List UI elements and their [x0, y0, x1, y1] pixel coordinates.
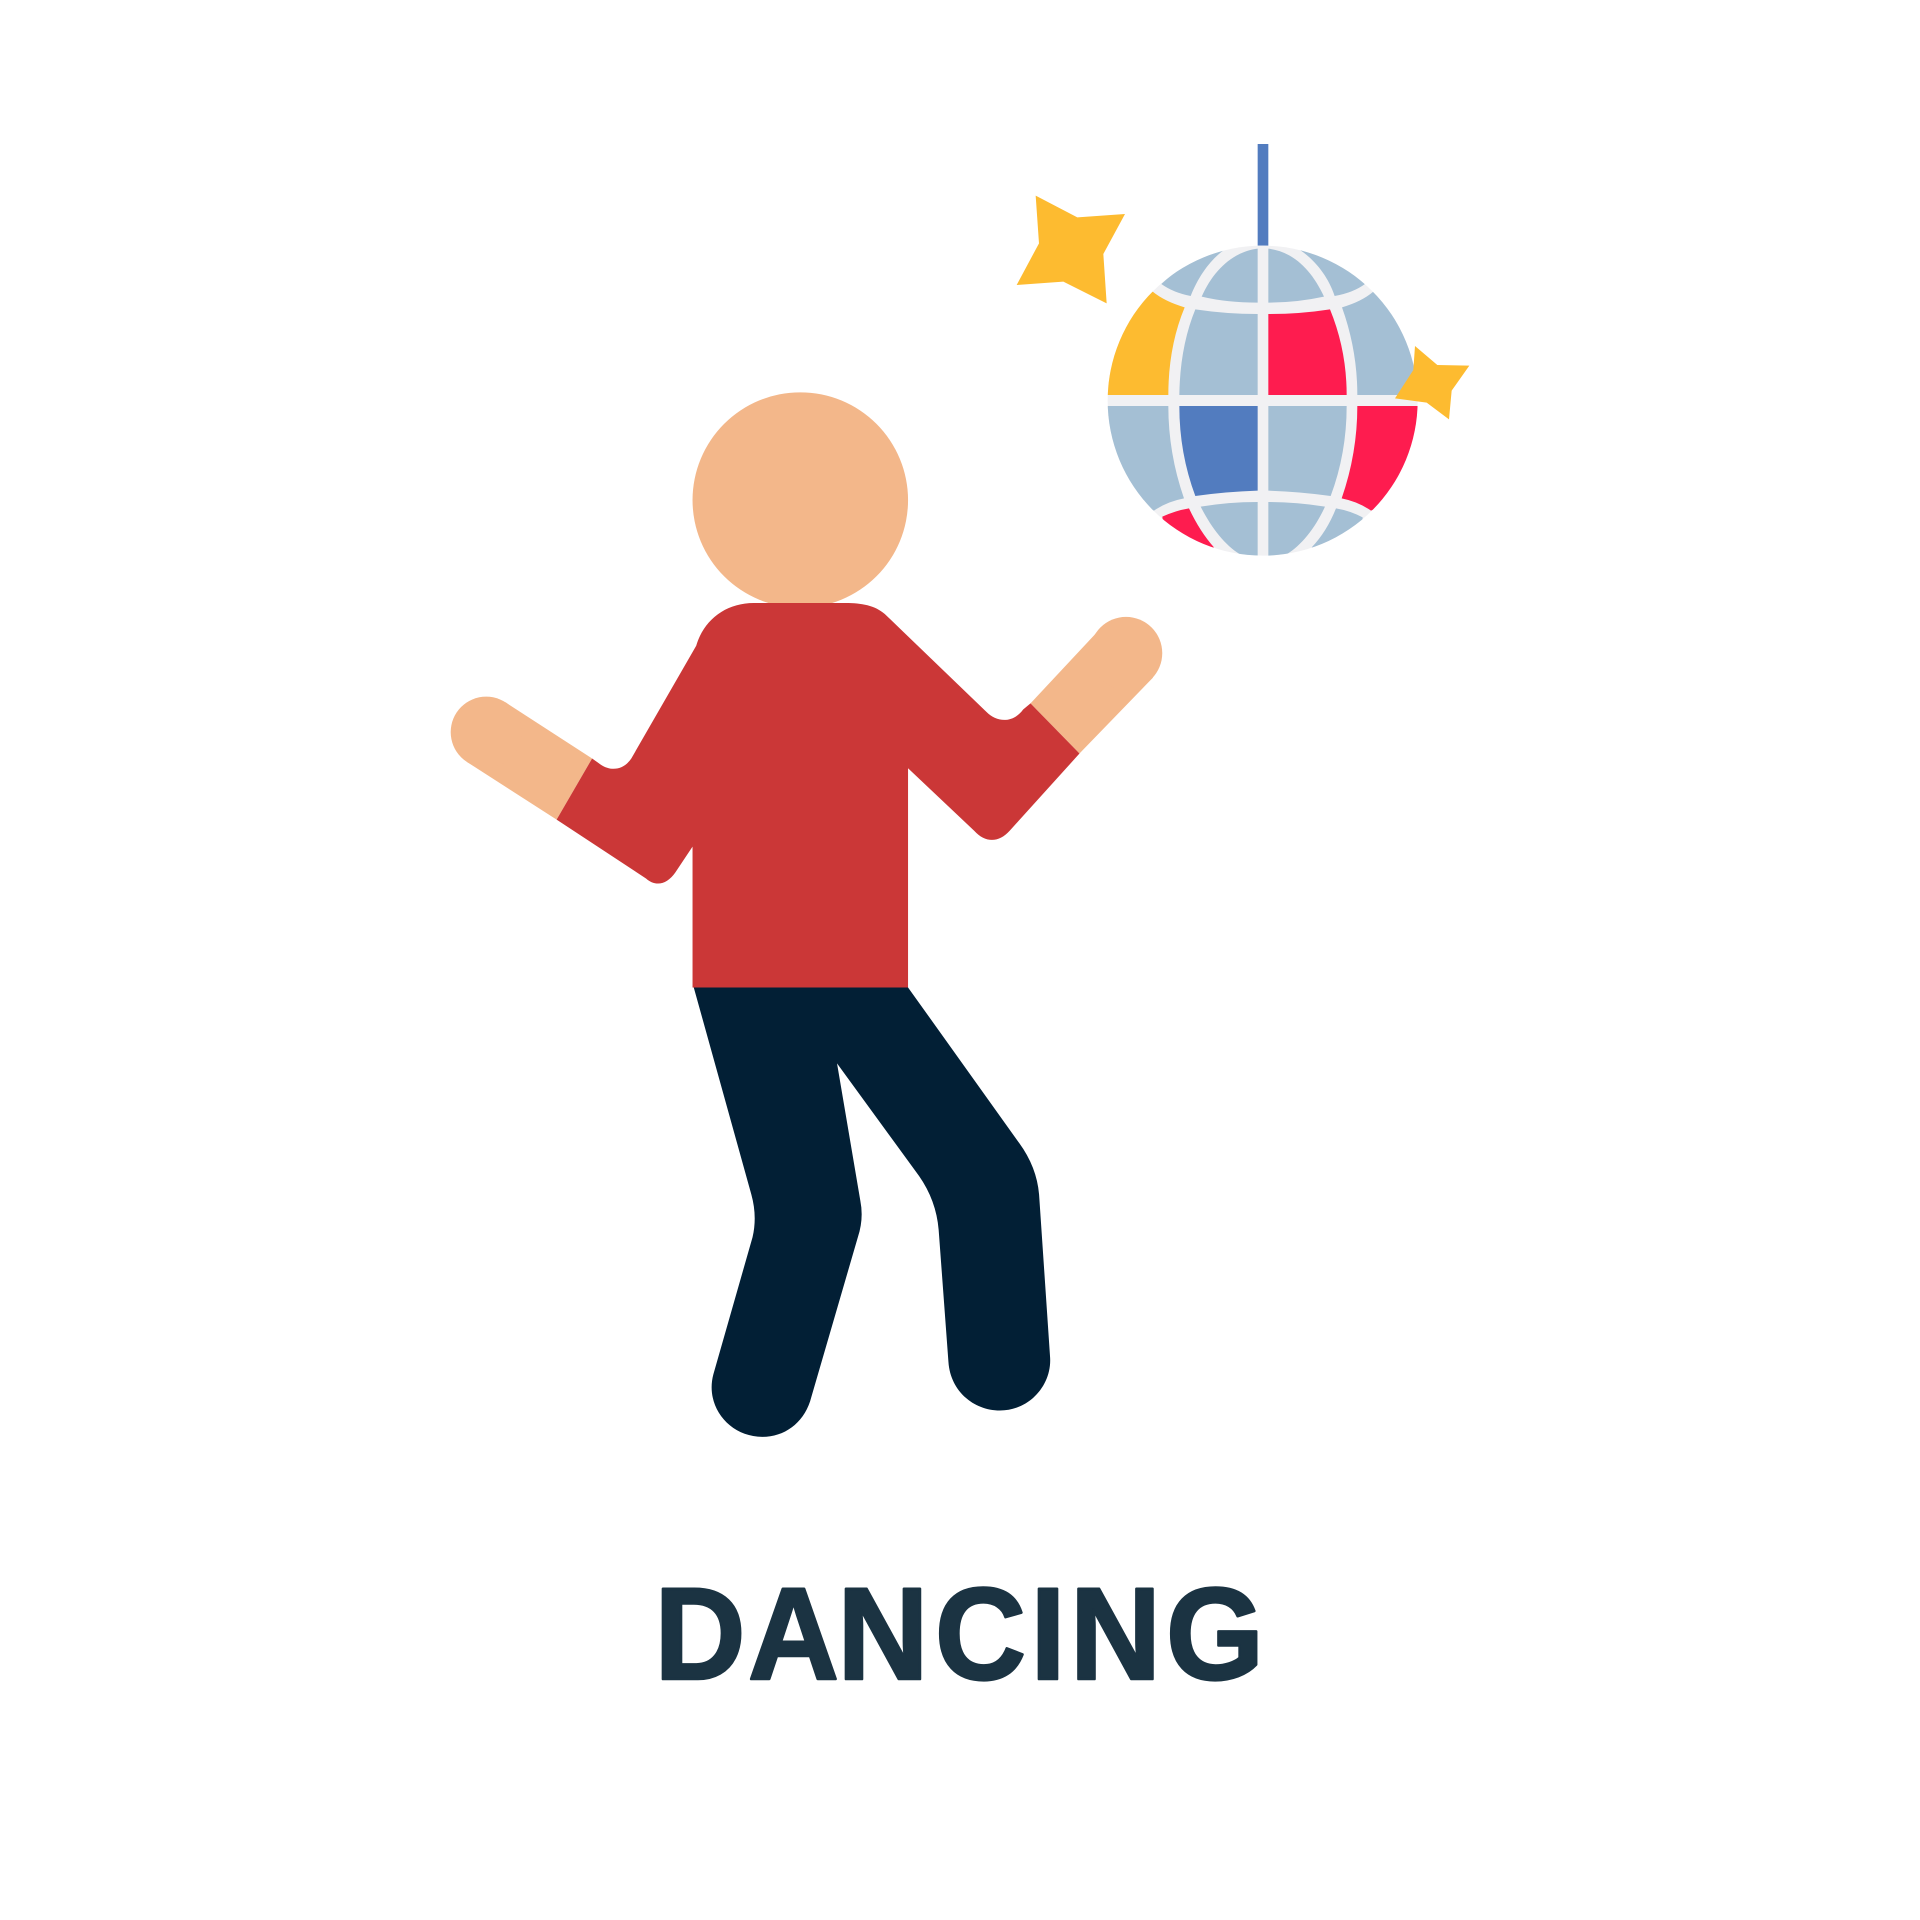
- left arm skin: [451, 697, 592, 820]
- red shirt: [557, 603, 1079, 987]
- right arm skin: [1030, 617, 1162, 754]
- ball base: [1108, 246, 1418, 556]
- large star: [1017, 196, 1125, 303]
- infographic: dancing icon: [450, 144, 1470, 1682]
- small star: [1395, 346, 1469, 419]
- hanging rod: [1258, 144, 1268, 246]
- trousers: [694, 987, 1050, 1437]
- ball mirror panels: [1100, 249, 1427, 560]
- head: [693, 392, 908, 608]
- dancing person: [451, 392, 1162, 1437]
- title: DANCING: [654, 1562, 1264, 1708]
- disco ball: [1017, 144, 1469, 560]
